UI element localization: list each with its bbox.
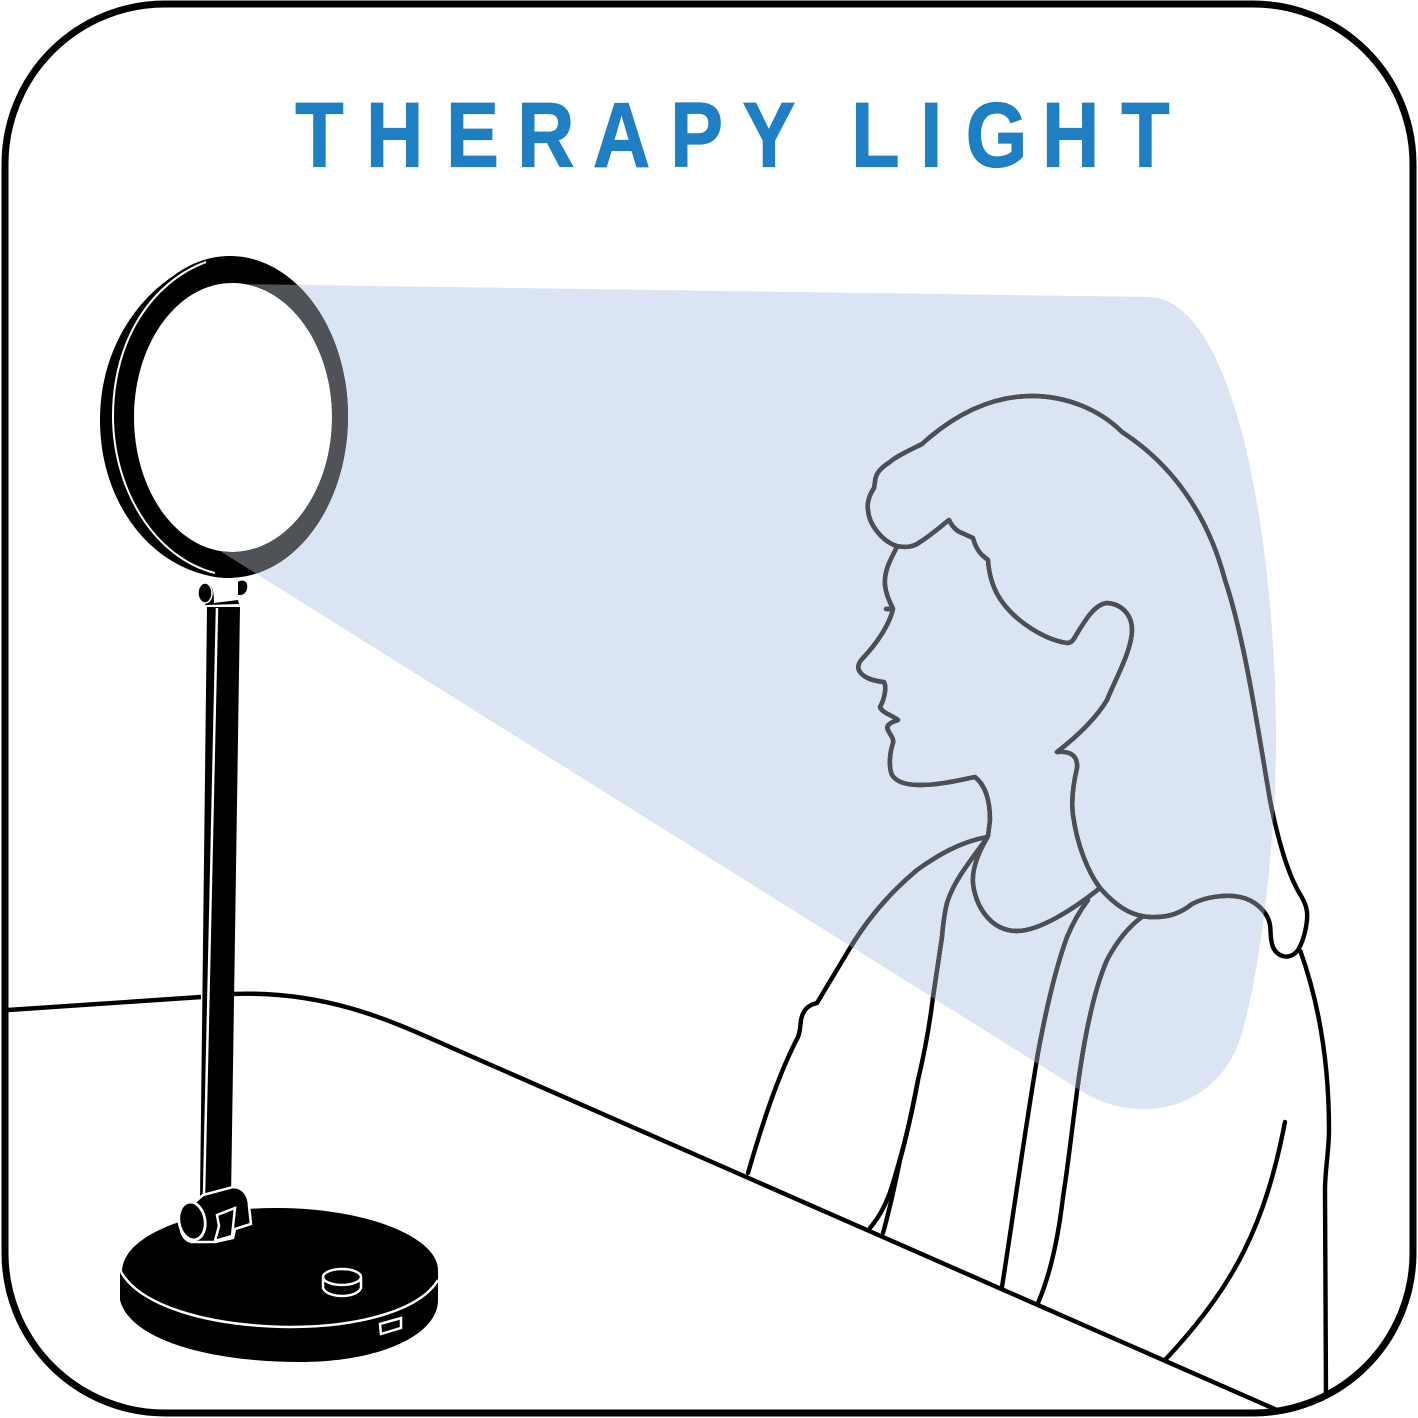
pole highlight: [204, 608, 217, 1196]
ring highlight: [113, 262, 215, 573]
ring shaded by beam: [220, 284, 348, 574]
person: right body edge: [1300, 950, 1329, 1397]
desk edge: [8, 994, 1277, 1410]
base top: [122, 1208, 438, 1326]
person outline: [748, 396, 1307, 1303]
base rim highlight: [121, 1272, 438, 1327]
ring hinge: [198, 581, 247, 605]
lamp ring: [113, 256, 348, 578]
USB port: [380, 1318, 401, 1334]
person lines inside the beam: [849, 394, 1274, 1090]
lamp pole: [200, 607, 240, 1198]
lamp ring back: [100, 256, 233, 578]
title: THERAPY LIGHT: [295, 84, 1170, 187]
person: arm crease: [1165, 1122, 1285, 1360]
pole clamp: [176, 1187, 251, 1242]
base side: [120, 1272, 438, 1362]
lamp ring screen: [134, 283, 332, 552]
base dial: [323, 1269, 361, 1296]
lamp: [100, 256, 438, 1362]
light beam: [220, 284, 1276, 1109]
